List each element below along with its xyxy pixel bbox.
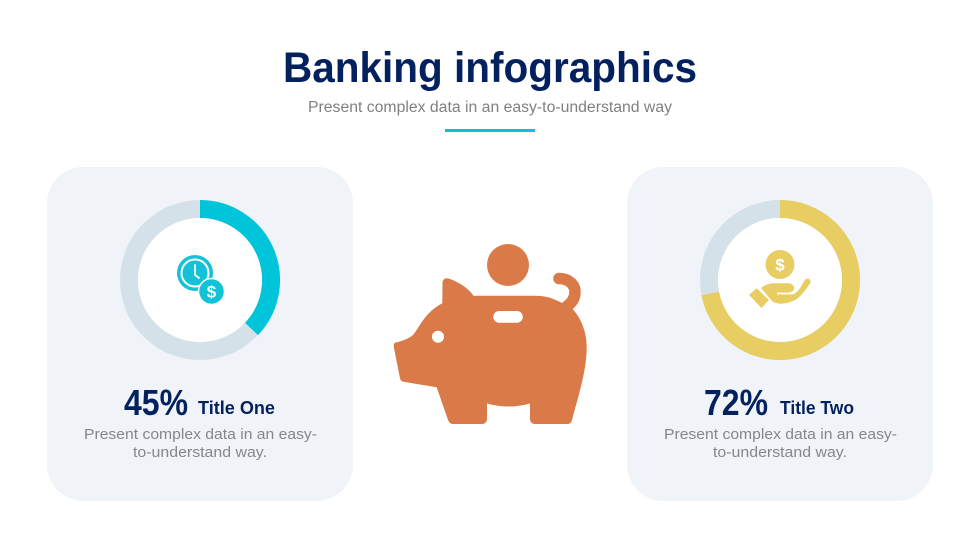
panel: title one <box>47 167 353 501</box>
donut chart: 45% <box>129 209 271 351</box>
description: title one: Present complex data in an easy- <box>84 426 317 443</box>
description: title one <box>84 426 317 461</box>
stat: 45%: 45% <box>124 382 188 423</box>
donut inner circle <box>718 218 842 342</box>
label: title two: Title Two <box>780 397 854 418</box>
donut inner circle <box>138 218 262 342</box>
icon: clock and dollar coin: $ <box>207 282 217 302</box>
description: title two <box>664 426 897 461</box>
title: Banking infographics <box>283 44 697 92</box>
description: title two: to-understand way. <box>713 444 847 461</box>
icon: clock and dollar coin <box>177 255 224 304</box>
description: title two: Present complex data in an easy- <box>664 426 897 443</box>
description: title one: to-understand way. <box>133 444 267 461</box>
panel: title two <box>627 167 933 501</box>
icon: hand holding dollar coin: $ <box>775 256 785 274</box>
icon: piggy bank with coin <box>394 244 587 424</box>
donut chart: 72% <box>709 209 851 351</box>
title underline accent <box>445 129 535 132</box>
label: title one: Title One <box>198 397 275 418</box>
icon: hand holding dollar coin <box>749 250 810 308</box>
subtitle: Present complex data in an easy-to-understand way <box>308 99 672 116</box>
stat: 72%: 72% <box>704 382 768 423</box>
